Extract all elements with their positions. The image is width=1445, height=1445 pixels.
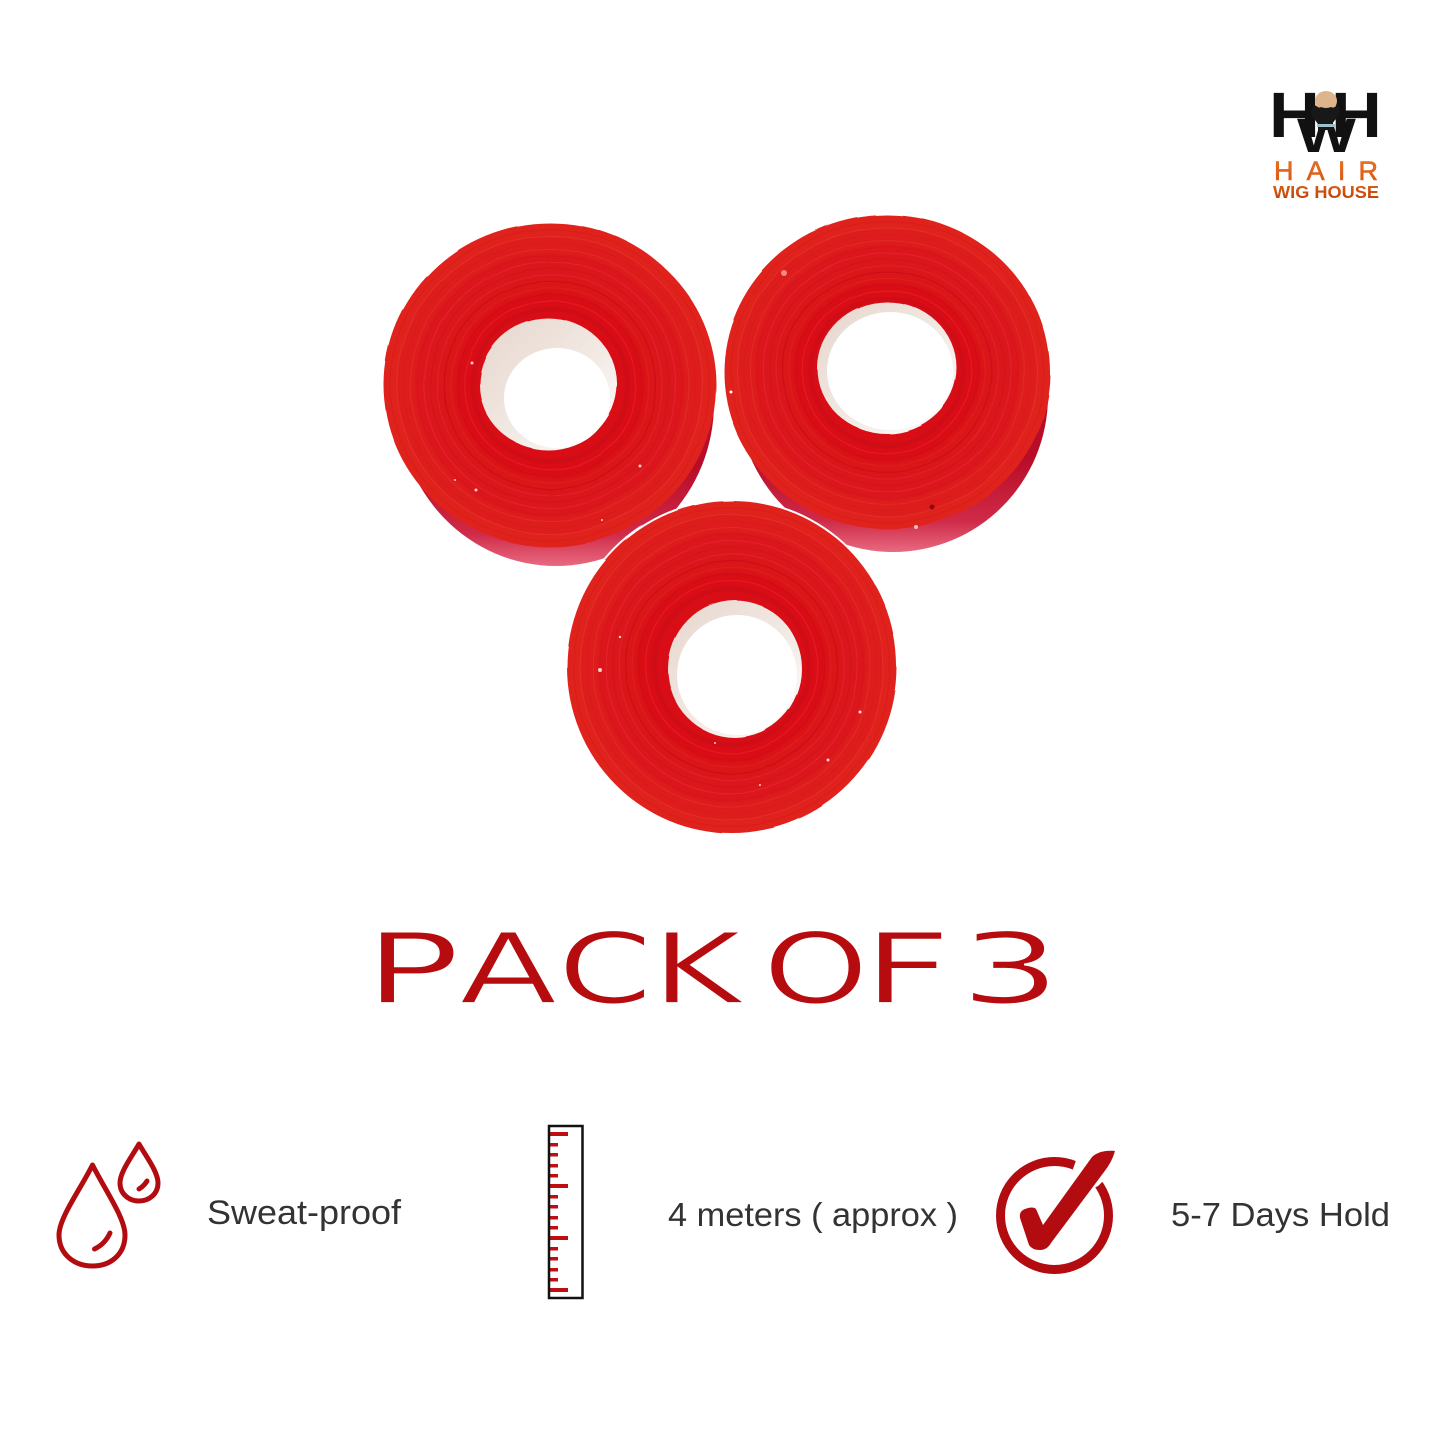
logo words WIG HOUSE: WIG HOUSE [1273, 182, 1379, 202]
label: 5-7 Days Hold: 5-7 Days Hold [1171, 1196, 1390, 1233]
title: PACK OF 3: F [862, 912, 952, 1026]
icon: check mark in circle [1000, 1140, 1120, 1270]
logo monogram letters: H [1331, 80, 1382, 151]
logo monogram letters: H [1269, 80, 1320, 151]
title: PACK OF 3: P [364, 913, 460, 1027]
label: 4 meters (approx): 4 meters ( approx ) [668, 1196, 958, 1233]
tape roll: bottom centre [565, 499, 899, 835]
product photo: three tape rolls [384, 215, 1050, 835]
title: PACK OF 3: C [558, 912, 653, 1026]
logo word HAIR: HAIR [1274, 156, 1378, 186]
icon: ruler [549, 1126, 582, 1298]
logo head [1311, 91, 1340, 130]
title: PACK OF 3: O [762, 912, 869, 1026]
title: PACK OF 3: A [459, 913, 558, 1027]
title: PACK OF 3: K [652, 913, 746, 1027]
logo: Hair Wig House [1269, 80, 1382, 202]
feature: hold duration [1000, 1140, 1390, 1270]
title: PACK OF 3: 3 [960, 913, 1061, 1027]
title: PACK OF 3 [364, 912, 1061, 1027]
label: Sweat-proof: Sweat-proof [207, 1194, 402, 1232]
feature: length [549, 1126, 958, 1298]
logo monogram letters: W [1297, 109, 1356, 162]
icon: water drops [59, 1144, 158, 1266]
logo monogram letters [1269, 80, 1382, 162]
tape roll: top right [724, 215, 1050, 552]
tape roll: top left [384, 223, 716, 566]
feature: sweat-proof [59, 1144, 402, 1266]
